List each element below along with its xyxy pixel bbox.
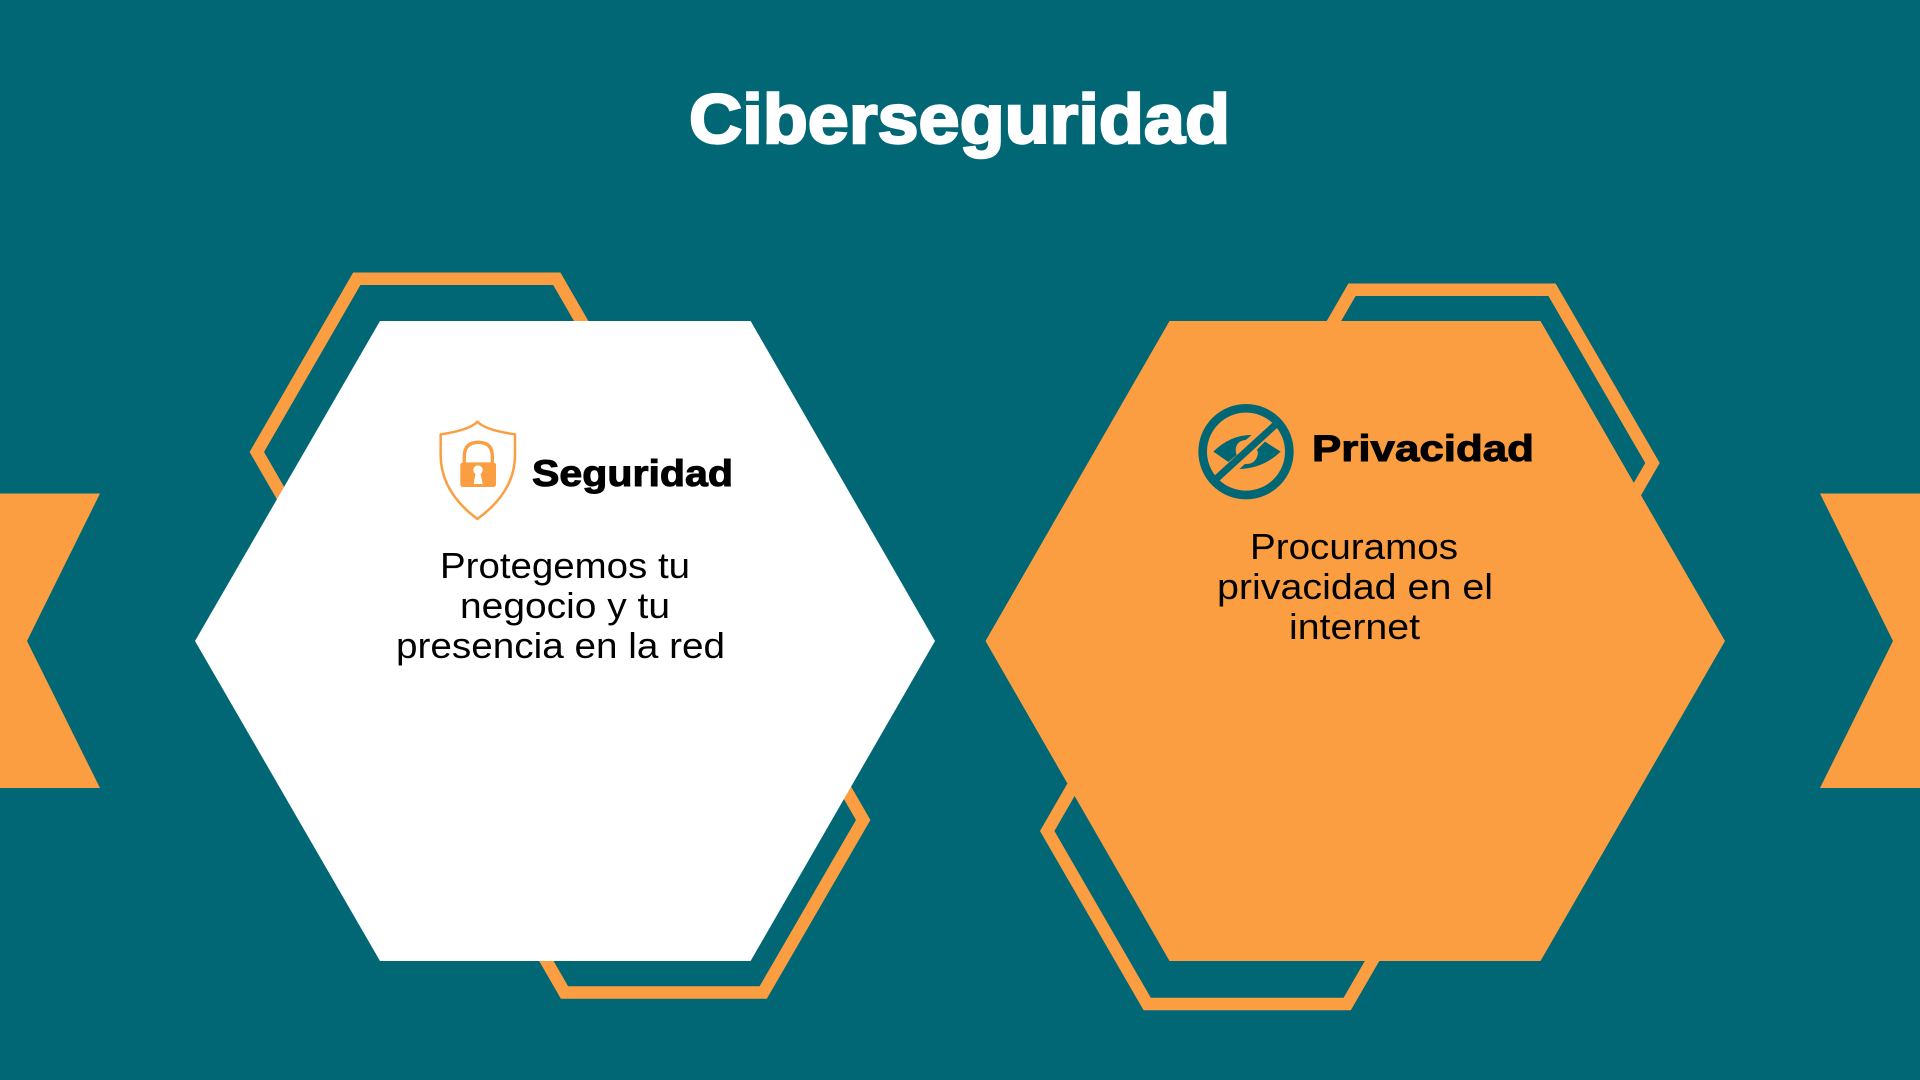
text block: seguridad description: Protegemos tu (440, 545, 690, 586)
heading: privacidad: Privacidad (1312, 428, 1534, 469)
arrow: right chevron (1820, 494, 1920, 788)
arrow: left chevron (0, 494, 100, 788)
text block: seguridad description: presencia en la red (396, 625, 725, 666)
text block: privacidad description: privacidad en el (1217, 566, 1493, 607)
panel: privacidad (986, 290, 1725, 1004)
text block: privacidad description (1217, 526, 1493, 647)
hexagon outline: top right (1252, 290, 1652, 636)
text block: seguridad description: negocio y tu (460, 585, 670, 626)
orange hexagon (986, 321, 1725, 961)
icon: shield with padlock (441, 422, 515, 519)
text block: privacidad description: Procuramos (1250, 526, 1458, 567)
panel: seguridad (195, 279, 935, 992)
heading: seguridad: Seguridad (532, 453, 733, 494)
text block: privacidad description: internet (1289, 606, 1420, 647)
icon: crossed-out eye (1203, 408, 1289, 495)
hexagon outline: top left (257, 279, 657, 625)
white hexagon (195, 321, 935, 961)
hexagon outline: bottom left (1047, 658, 1447, 1004)
title: Ciberseguridad (689, 80, 1230, 158)
text block: seguridad description (396, 545, 725, 666)
hexagon outline: bottom right (465, 647, 863, 992)
